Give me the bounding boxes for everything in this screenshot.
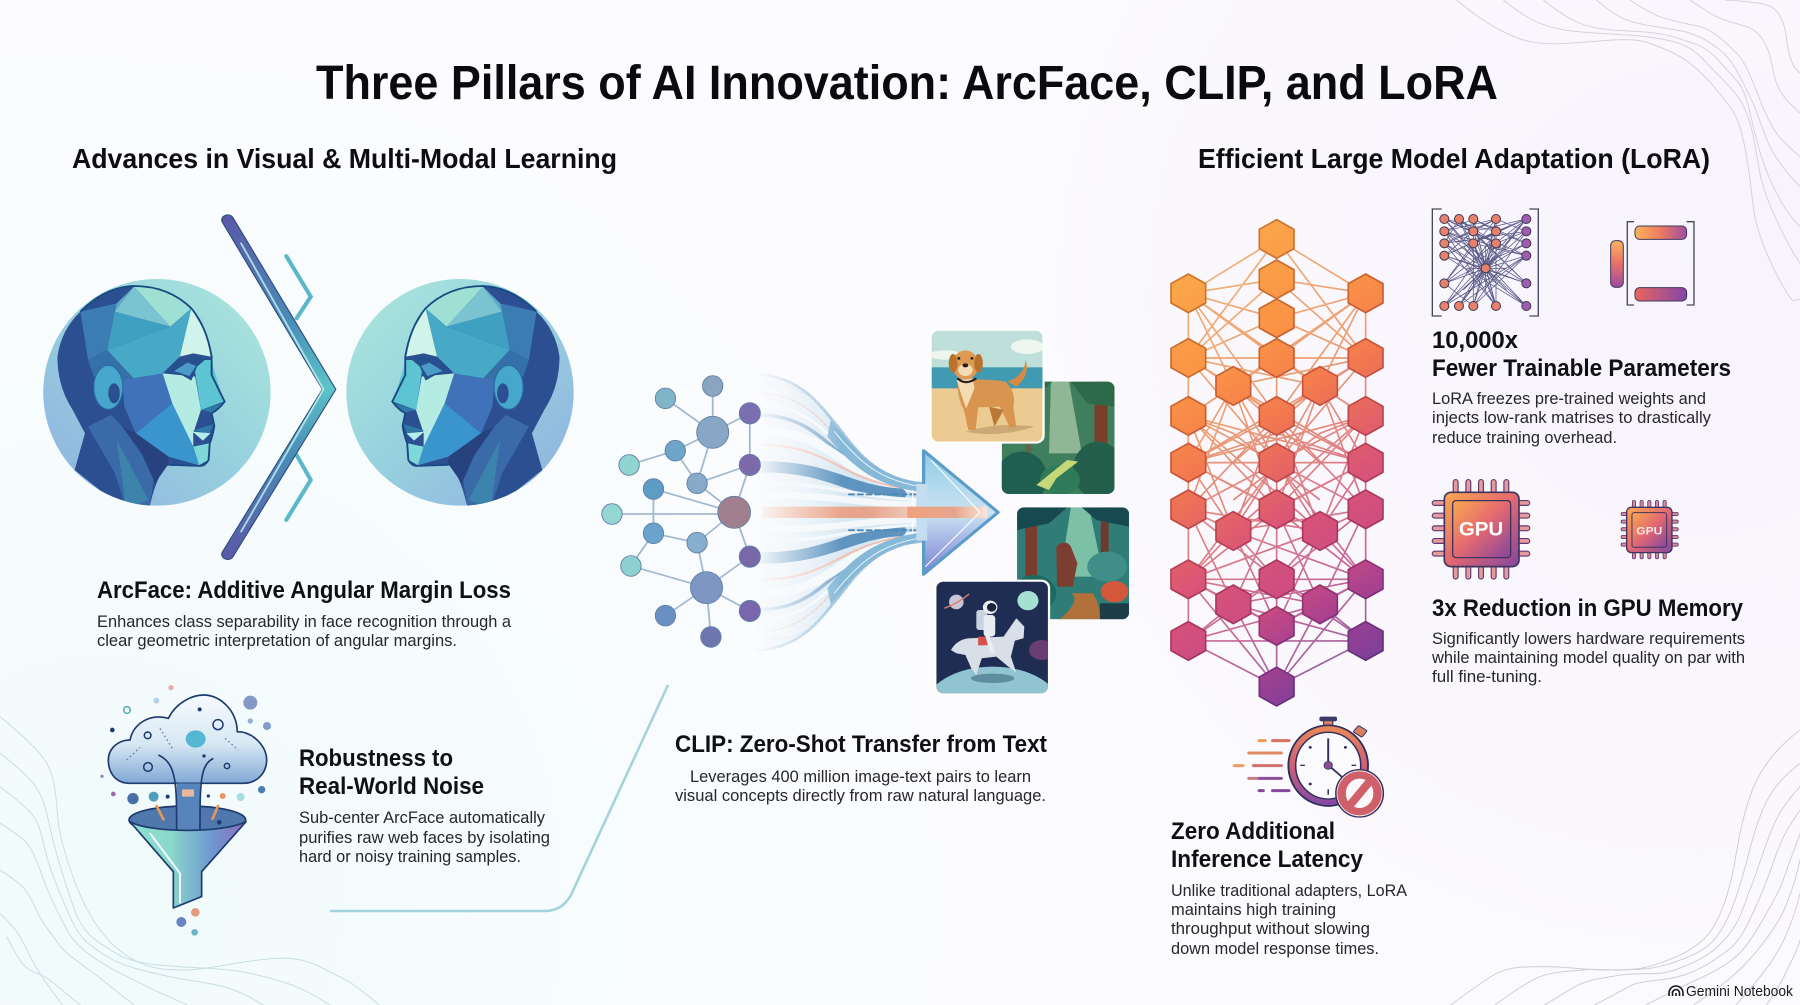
description: parameters: reduce training overhead. [1432, 428, 1617, 447]
description: GPU memory: full fine-tuning. [1432, 667, 1542, 686]
image: bear in forest [1013, 507, 1129, 619]
icon: angular margin chevron [228, 220, 329, 554]
description: CLIP: visual concepts directly from raw natural language. [675, 786, 1046, 805]
description: inference latency: Unlike traditional adapters, LoRA [1171, 881, 1408, 900]
arrow head [907, 451, 998, 574]
panel: ArcFace illustration [43, 220, 574, 554]
heading: GPU memory: 3x Reduction in GPU Memory [1432, 595, 1744, 622]
description: inference latency [1171, 881, 1408, 958]
image: dog on beach [929, 329, 1045, 444]
image: astronaut riding horse [936, 580, 1050, 694]
description: ArcFace [97, 612, 512, 650]
description: CLIP [675, 767, 1046, 805]
heading: 10,000x: 10,000x [1432, 327, 1519, 354]
description: GPU memory: while maintaining model quality on par with [1431, 648, 1745, 667]
text: trainable parameters [1432, 327, 1731, 447]
description: ArcFace: Enhances class separability in face recognition through a [97, 612, 512, 631]
heading: inference latency: Inference Latency [1171, 846, 1364, 873]
title: Three Pillars of AI Innovation: ArcFace, CLIP, and LoRA [316, 57, 1498, 110]
icon: left face [43, 279, 271, 508]
text: CLIP [675, 731, 1047, 805]
icon: stopwatch with prohibition sign [1234, 717, 1383, 817]
description: robustness: purifies raw web faces by isolating [299, 828, 550, 847]
description: inference latency: down model response times. [1171, 939, 1379, 958]
icon: small GPU [1623, 502, 1677, 557]
text: inference latency [1171, 818, 1408, 958]
description: robustness: Sub-center ArcFace automatically [299, 808, 546, 827]
description: inference latency: maintains high training [1171, 900, 1336, 919]
description: robustness [299, 808, 550, 866]
heading: 10,000x: Fewer Trainable Parameters [1432, 355, 1731, 382]
text encoder network [602, 376, 760, 647]
text: ArcFace [97, 577, 512, 650]
description: parameters [1432, 389, 1712, 447]
heading: robustness: Robustness to [299, 745, 453, 772]
icon: large GPU: GPU [1459, 519, 1503, 540]
description: GPU memory: Significantly lowers hardware requirements [1432, 629, 1745, 648]
icon: dense weight matrix [1432, 209, 1538, 316]
description: ArcFace: clear geometric interpretation of angular margins. [97, 631, 457, 650]
heading: ArcFace: ArcFace: Additive Angular Margin Loss [97, 577, 511, 604]
description: GPU memory [1431, 629, 1745, 686]
hexagon nodes [1171, 220, 1383, 706]
text: robustness to noise [299, 745, 550, 866]
description: parameters: LoRA freezes pre-trained weights and [1432, 389, 1706, 408]
panel: LoRA hexagon network [1171, 220, 1383, 706]
heading: inference latency [1171, 818, 1364, 873]
panel: LoRA parameter and GPU icons [1432, 209, 1694, 577]
image: jungle forest [1002, 382, 1114, 494]
description: inference latency: throughput without slowing [1171, 919, 1370, 938]
icon: right face [346, 279, 574, 508]
heading: robustness: Real-World Noise [299, 773, 484, 800]
heading: 10,000x [1432, 327, 1731, 382]
icon: low-rank matrices [1611, 222, 1694, 305]
watermark: Gemini Notebook: Gemini Notebook [1686, 983, 1793, 1000]
icon: small GPU: GPU [1636, 525, 1662, 537]
text: GPU memory [1431, 595, 1745, 686]
heading: inference latency: Zero Additional [1171, 818, 1335, 845]
heading: CLIP: CLIP: Zero-Shot Transfer from Text [675, 731, 1047, 758]
flow streams [759, 374, 922, 651]
icon: cloud funnel [100, 685, 271, 936]
connector line to CLIP [330, 685, 668, 911]
description: robustness: hard or noisy training samples. [299, 847, 521, 866]
description: parameters: injects low-rank matrises to drastically [1432, 408, 1712, 427]
description: CLIP: Leverages 400 million image-text pairs to learn [690, 767, 1031, 786]
heading: LoRA adaptation: Efficient Large Model Adaptation (LoRA) [1198, 143, 1710, 174]
panel: CLIP illustration [601, 330, 1129, 694]
heading: visual and multi-modal learning: Advances in Visual & Multi-Modal Learning [72, 143, 617, 174]
heading: robustness [299, 745, 484, 800]
icon: large GPU [1435, 482, 1527, 577]
network edges [1188, 239, 1366, 687]
